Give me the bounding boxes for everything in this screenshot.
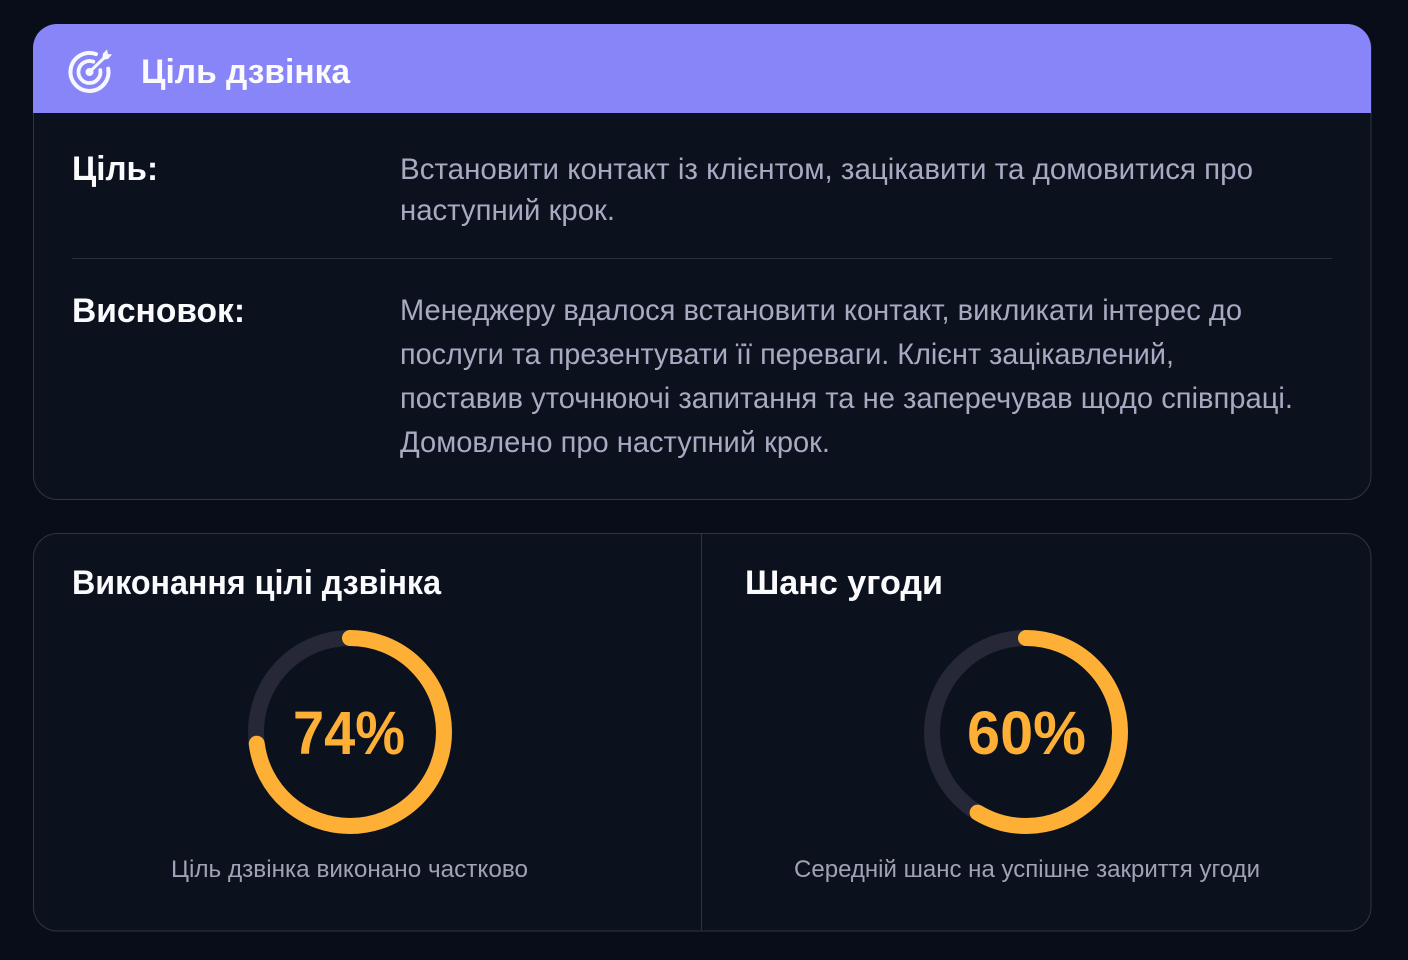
- conclusion row: послуги та презентувати її переваги. Клієнт зацікавлений,: [400, 338, 1174, 371]
- donut chart: 60%: [932, 638, 1120, 826]
- metric: deal chance: [745, 564, 1260, 883]
- conclusion row: Менеджеру вдалося встановити контакт, викликати інтерес до: [400, 294, 1242, 327]
- icon: target with arrow: [70, 50, 112, 91]
- header title: Ціль дзвінка: [141, 53, 351, 91]
- goal row: [72, 150, 1253, 227]
- goal row: наступний крок.: [400, 194, 615, 227]
- panel header: [33, 24, 1371, 113]
- heading: Виконання цілі дзвінка: [72, 564, 442, 602]
- donut chart: 74%: 74%: [293, 699, 405, 767]
- conclusion row: [72, 292, 1293, 459]
- conclusion row: Висновок:: [72, 292, 245, 330]
- conclusion row: поставив уточнюючі запитання та не заперечував щодо співпраці.: [400, 382, 1293, 415]
- panel: call goal: [33, 24, 1371, 500]
- goal row: Встановити контакт із клієнтом, зацікавити та домовитися про: [400, 153, 1253, 186]
- caption: Ціль дзвінка виконано частково: [171, 856, 528, 883]
- caption: Середній шанс на успішне закриття угоди: [794, 856, 1260, 883]
- donut chart: 60%: 60%: [967, 699, 1086, 767]
- goal row: Ціль:: [72, 150, 158, 188]
- panel: metrics: [34, 534, 1371, 931]
- heading: Шанс угоди: [745, 564, 943, 602]
- donut chart: 74%: [256, 638, 444, 826]
- conclusion row: Домовлено про наступний крок.: [400, 426, 830, 459]
- metric: call goal completion: [72, 564, 528, 883]
